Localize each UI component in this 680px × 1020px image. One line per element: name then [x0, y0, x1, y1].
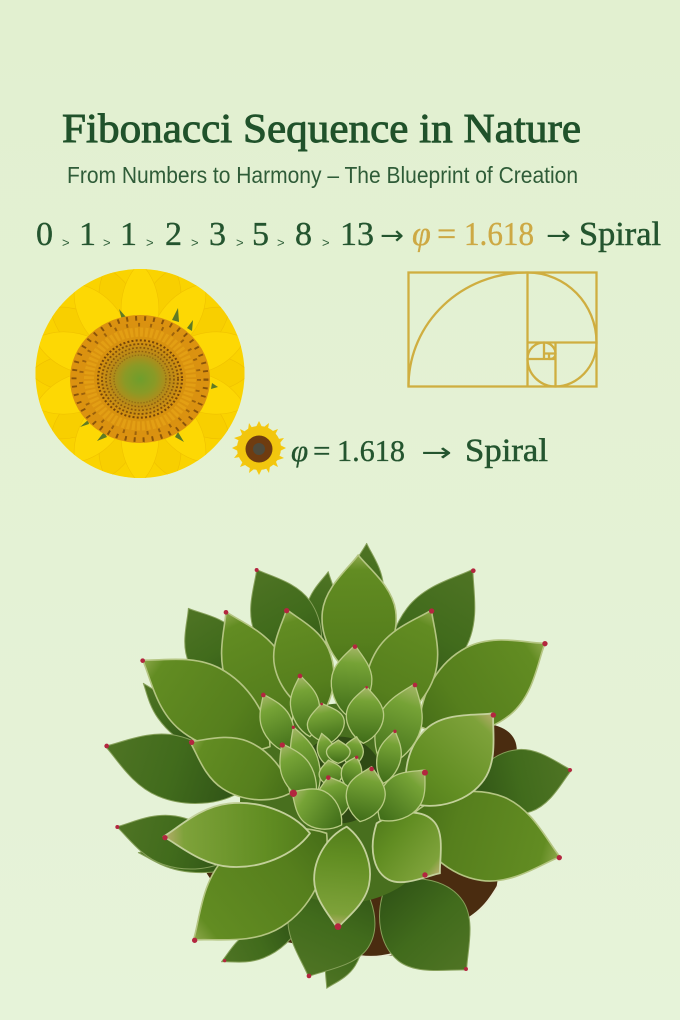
Fibonacci number sequence: >: [146, 235, 154, 250]
Fibonacci number sequence: >: [236, 235, 244, 250]
golden ratio value: φ: [412, 216, 431, 253]
Fibonacci number sequence: >: [277, 235, 285, 250]
large sunflower close-up: [36, 269, 244, 478]
Fibonacci number sequence: >: [322, 235, 330, 250]
phi equals 1.618 arrow Spiral caption: =: [313, 433, 330, 468]
Fibonacci number sequence: 1: [120, 216, 137, 253]
Fibonacci number sequence: 13: [340, 216, 374, 253]
Fibonacci number sequence: >: [191, 235, 199, 250]
arrow and Spiral label: Spiral: [579, 216, 661, 253]
phi equals 1.618 arrow Spiral caption: [291, 433, 548, 469]
red leaf tips: [104, 568, 572, 978]
title: Fibonacci Sequence in Nature: [62, 105, 581, 151]
Fibonacci number sequence: 1: [79, 216, 96, 253]
Fibonacci number sequence: 2: [165, 216, 182, 253]
Fibonacci number sequence: >: [62, 235, 70, 250]
golden ratio value: [412, 216, 534, 253]
Fibonacci number sequence: 3: [209, 216, 226, 253]
rosette centre: [297, 737, 383, 823]
front lighter leaves: [163, 687, 522, 931]
golden ratio value: =: [437, 216, 456, 253]
golden ratio value: 1.618: [464, 216, 534, 253]
back leaves: [95, 543, 579, 1000]
succulent plant: [95, 543, 579, 1000]
golden spiral diagram: [408, 272, 596, 386]
Fibonacci number sequence: →: [380, 221, 404, 251]
middle leaves: [122, 554, 571, 975]
Fibonacci number sequence: >: [103, 235, 111, 250]
green underlay hiding the pot behind the rosette: [240, 703, 447, 903]
inner rosette leaves: [249, 643, 440, 840]
phi equals 1.618 arrow Spiral caption: →: [421, 438, 452, 468]
Fibonacci number sequence: 5: [252, 216, 269, 253]
phi equals 1.618 arrow Spiral caption: Spiral: [465, 433, 548, 469]
phi equals 1.618 arrow Spiral caption: 1.618: [337, 433, 405, 468]
small sunflower icon: [232, 421, 286, 475]
subtitle: From Numbers to Harmony – The Blueprint of Creation: [67, 162, 578, 188]
Fibonacci number sequence: 0: [36, 216, 53, 253]
plant pot: [207, 723, 517, 957]
Fibonacci number sequence: [36, 216, 404, 253]
Fibonacci number sequence: 8: [295, 216, 312, 253]
phi equals 1.618 arrow Spiral caption: φ: [291, 433, 308, 468]
arrow and Spiral label: →: [546, 221, 571, 251]
